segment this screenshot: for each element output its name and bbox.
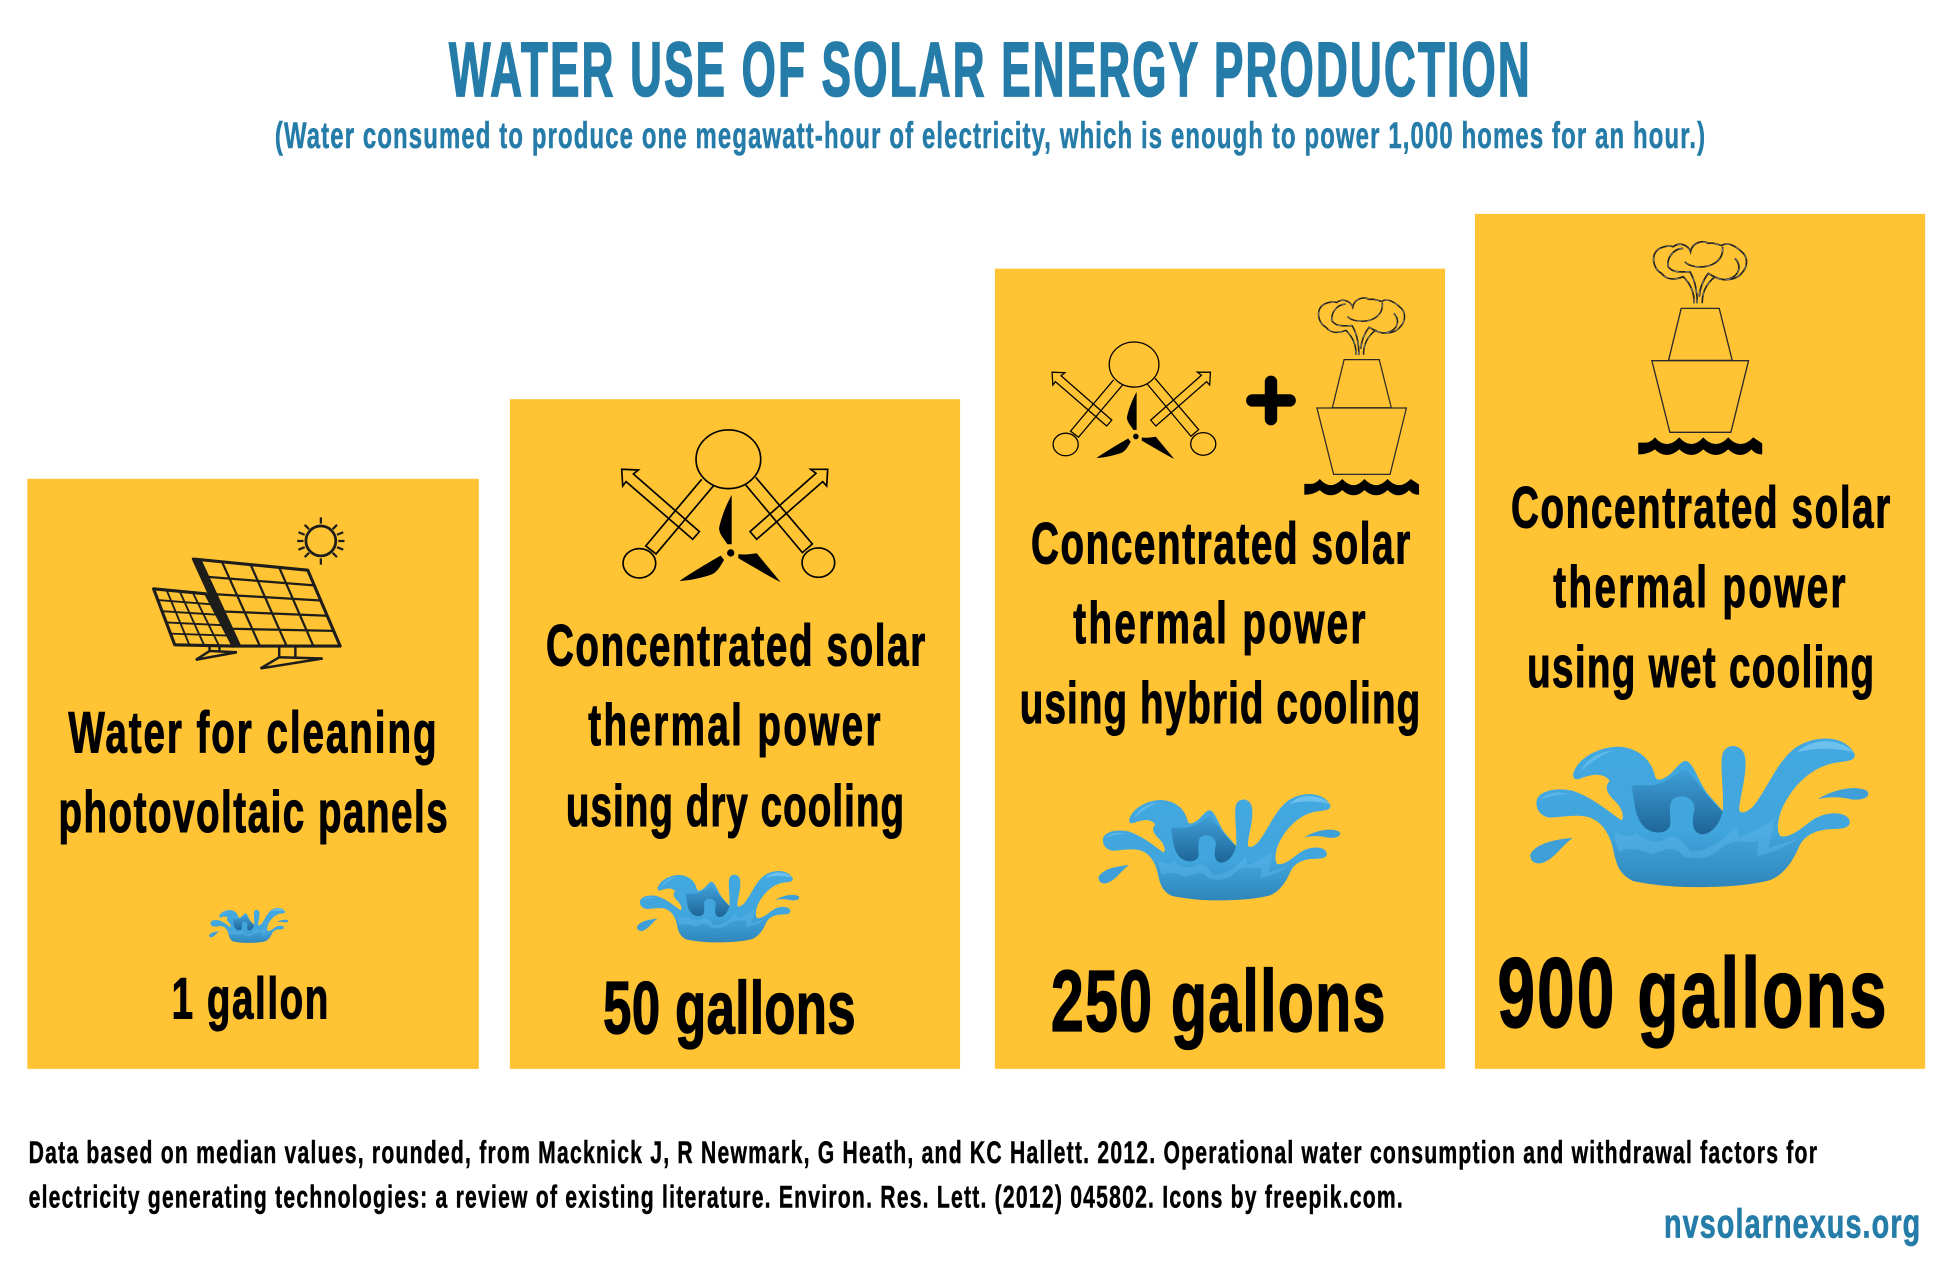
- panel: hybrid cooling: [995, 269, 1445, 1069]
- label: cleaning: [58, 700, 448, 845]
- label: hybrid cooling: Concentrated solar: [1031, 511, 1410, 576]
- icon: water splash: [1099, 794, 1340, 900]
- icon: cooling tower: [1304, 298, 1419, 495]
- label: wet cooling: [1511, 475, 1890, 700]
- label: cleaning: photovoltaic panels: [58, 780, 448, 845]
- subtitle: (Water consumed to produce one megawatt-hour of electricity, which is enough to power 1,000 homes for an hour.): [275, 115, 1705, 156]
- source note: [29, 1135, 1817, 1215]
- label: hybrid cooling: thermal power: [1073, 591, 1366, 656]
- source note: electricity generating technologies: a review of existing literature. Environ. Res. Lett. (2012) 045802. Icons by freepik.com.: [29, 1179, 1403, 1215]
- label: dry cooling: using dry cooling: [566, 774, 904, 839]
- label: hybrid cooling: [1020, 511, 1420, 736]
- label: wet cooling: thermal power: [1553, 555, 1846, 620]
- icon: solar panels and sun: [154, 517, 344, 668]
- label: dry cooling: Concentrated solar: [546, 613, 925, 678]
- icon: water splash large: [1530, 738, 1868, 887]
- icon: plus: [1252, 382, 1290, 419]
- icon: water splash: [637, 871, 799, 942]
- icon: concentrated solar plant: [622, 430, 835, 582]
- value: 250 gallons: 250 gallons: [1051, 953, 1385, 1050]
- panel: wet cooling: [1475, 214, 1925, 1069]
- icon: concentrated solar plant: [1052, 342, 1216, 459]
- label: wet cooling: using wet cooling: [1527, 635, 1874, 700]
- source note: Data based on median values, rounded, from Macknick J, R Newmark, G Heath, and KC Hallett. 2012. Operational water consumption and withdrawal factors for: [29, 1135, 1817, 1170]
- value: 50 gallons: 50 gallons: [603, 966, 856, 1050]
- title: WATER USE OF SOLAR ENERGY PRODUCTION: [449, 27, 1530, 113]
- label: dry cooling: thermal power: [588, 693, 881, 758]
- label: hybrid cooling: using hybrid cooling: [1020, 671, 1420, 736]
- label: dry cooling: [546, 613, 925, 839]
- website: nvsolarnexus.org: [1664, 1200, 1920, 1247]
- label: cleaning: Water for cleaning: [68, 700, 437, 765]
- value: 900 gallons: 900 gallons: [1497, 938, 1887, 1049]
- value: 1 gallon: 1 gallon: [172, 967, 328, 1032]
- icon: cooling tower: [1638, 242, 1762, 455]
- icon: water splash small: [209, 908, 288, 943]
- panel: photovoltaic cleaning: [27, 479, 479, 1069]
- label: wet cooling: Concentrated solar: [1511, 475, 1890, 540]
- panel: dry cooling: [510, 399, 960, 1069]
